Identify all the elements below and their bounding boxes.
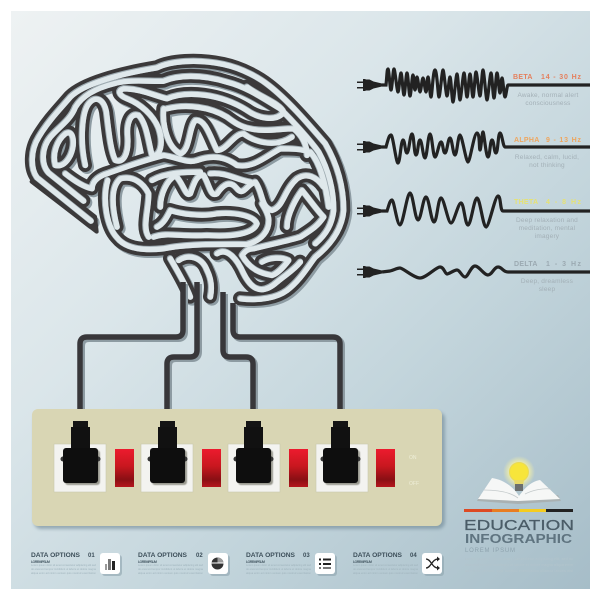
brainwave: delta: [357, 266, 590, 278]
label: theta: [514, 199, 582, 240]
on off marks: [409, 455, 419, 487]
label: delta: [514, 261, 582, 293]
icon: pie chart: [208, 553, 230, 576]
label: delta: sleep: [539, 286, 555, 293]
brainwave: alpha: [357, 132, 590, 163]
label: beta: 14 - 30 Hz: [541, 74, 582, 81]
label: theta: 4 - 8 Hz: [546, 199, 582, 206]
title: education infographic: INFOGRAPHIC: [465, 531, 573, 546]
label: beta: BETA: [513, 74, 533, 81]
title: education infographic: LOREM IPSUM: [465, 548, 516, 554]
plug icon: [357, 141, 382, 153]
icon: list: [315, 553, 337, 576]
label: theta: meditation, mental: [519, 225, 576, 232]
data option 2: 02: [196, 553, 203, 559]
colour bar: [464, 509, 573, 512]
plug icon: [357, 205, 382, 217]
data option 3: 03: [303, 553, 310, 559]
title: education infographic: Lorem ipsum dolor sit amet, consectetur adipiscing elit, sed do: [465, 557, 573, 561]
data option 3: aliqua enim ad minim veniam quis nostrud exercitation: [246, 571, 312, 575]
title: education infographic: EDUCATION: [464, 517, 574, 534]
data option 1: 01: [88, 553, 95, 559]
socket 3 with plug and switch: [228, 421, 308, 492]
data option 1: DATA OPTIONS: [31, 553, 80, 559]
icon: light bulb over open book: [477, 456, 561, 504]
label: theta: THETA: [514, 199, 538, 206]
plug icon: [357, 266, 382, 278]
label: beta: [513, 74, 582, 107]
label: alpha: not thinking: [529, 162, 565, 169]
label: alpha: [514, 137, 582, 169]
label: beta: consciousness: [525, 100, 571, 107]
data option 1: [31, 553, 122, 576]
data option 4: DATA OPTIONS: [353, 553, 402, 559]
label: theta: imagery: [535, 233, 560, 240]
title: education infographic: [464, 517, 574, 573]
label: alpha: Relaxed, calm, lucid,: [515, 154, 579, 161]
data option 1: aliqua enim ad minim veniam quis nostrud exercitation: [31, 571, 97, 575]
data option 1: LOREM IPSUM: [31, 560, 50, 564]
data option 2: [138, 553, 230, 576]
icon: shuffle arrows: [422, 553, 444, 576]
label: alpha: ALPHA: [514, 137, 540, 144]
data option 4: LOREM IPSUM: [353, 560, 372, 564]
data option 4: [353, 553, 444, 576]
brainwave: theta: [357, 193, 590, 227]
power strip: [32, 409, 445, 529]
label: beta: Awake, normal alert: [517, 92, 579, 99]
data option 1: do eiusmod tempor incididunt ut labore et dolore magna: [31, 567, 97, 571]
data option 3: [246, 553, 337, 576]
on off marks: OFF: [409, 481, 419, 487]
data option 2: DATA OPTIONS: [138, 553, 187, 559]
data option 2: do eiusmod tempor incididunt ut labore et dolore magna: [138, 567, 204, 571]
label: alpha: 9 - 13 Hz: [546, 137, 582, 144]
label: theta: Deep relaxation and: [516, 217, 578, 224]
data option 3: DATA OPTIONS: [246, 553, 295, 559]
on off marks: ON: [409, 455, 417, 461]
data option 4: do eiusmod tempor incididunt ut labore et dolore magna: [353, 567, 419, 571]
title: education infographic: eiusmod tempor incididunt ut labore et dolore magna aliqua enim: [465, 563, 573, 567]
data option 4: aliqua enim ad minim veniam quis nostrud exercitation: [353, 571, 419, 575]
socket 4 with plug and switch: [316, 421, 395, 492]
plug icon: [357, 79, 382, 91]
socket 1 with plug and switch: [54, 421, 134, 492]
icon: bar chart: [100, 553, 122, 576]
data option 4: 04: [410, 553, 417, 559]
socket 2 with plug and switch: [141, 421, 221, 492]
data option 2: LOREM IPSUM: [138, 560, 157, 564]
data option 3: Lorem ipsum dolor sit amet consectetur adipiscing elit sed: [246, 563, 312, 567]
brain made of cable: [32, 61, 345, 301]
label: delta: 1 - 3 Hz: [546, 261, 582, 268]
brainwave: beta: [357, 69, 590, 102]
cables from brain to plugs: [80, 282, 342, 427]
data option 2: aliqua enim ad minim veniam quis nostrud exercitation: [138, 571, 204, 575]
label: delta: DELTA: [514, 261, 538, 268]
title: education infographic: ad minim veniam, quis nostrud exercitation ullamco laboris nisi: [465, 569, 573, 573]
label: delta: Deep, dreamless: [521, 278, 574, 285]
data option 3: do eiusmod tempor incididunt ut labore et dolore magna: [246, 567, 312, 571]
data option 3: LOREM IPSUM: [246, 560, 265, 564]
data option 1: Lorem ipsum dolor sit amet consectetur adipiscing elit sed: [31, 563, 97, 567]
data option 2: Lorem ipsum dolor sit amet consectetur adipiscing elit sed: [138, 563, 204, 567]
data option 4: Lorem ipsum dolor sit amet consectetur adipiscing elit sed: [353, 563, 419, 567]
